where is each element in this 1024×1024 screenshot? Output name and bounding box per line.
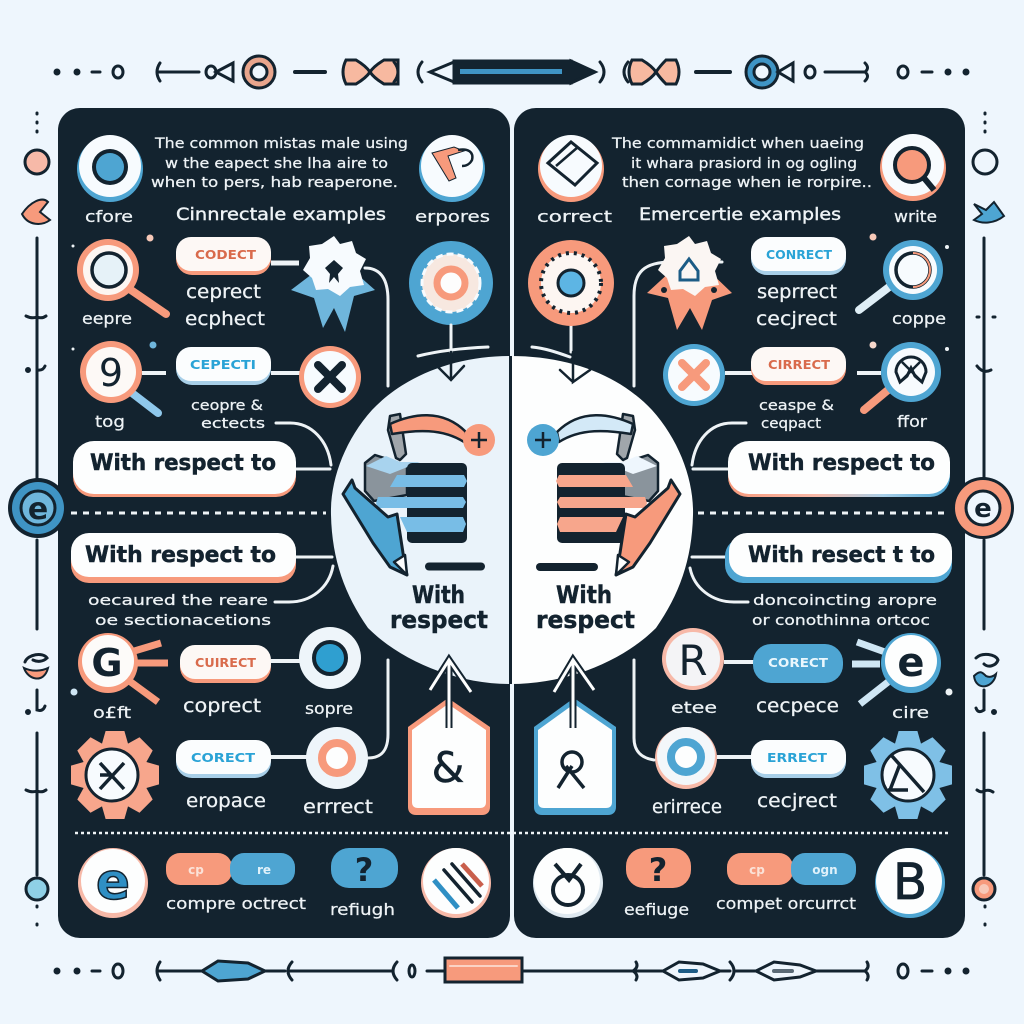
bottom left pill: re (257, 863, 271, 877)
connector right upper (634, 262, 722, 386)
row: left 2: tog (95, 412, 125, 431)
row: right 4: ERRECT (767, 751, 828, 765)
bottom left question (330, 848, 398, 919)
pill: left with respect to upper (73, 441, 296, 497)
central right glyph (527, 414, 680, 575)
panel: left (58, 108, 510, 938)
left intro text: w the eapect she lha aire to (165, 156, 388, 172)
tag: left: & (432, 743, 464, 792)
central right label: With (556, 581, 612, 609)
bottom right knot (533, 848, 603, 918)
row: left 2: 9 (99, 351, 123, 395)
row: left 4: CORECT (191, 751, 256, 765)
arrow down right (532, 325, 590, 382)
row: right 1 icons (528, 234, 949, 330)
tag: right (534, 698, 616, 815)
pill: left with respect to lower: With respect to (85, 543, 276, 568)
left intro text: when to pers, hab reaperone. (151, 175, 398, 191)
bottom left pill: cp (188, 863, 204, 877)
row: left 2: CEPECTI (190, 358, 256, 372)
icon: top left tag (415, 135, 490, 226)
row: right 1 icons: cecjrect (756, 308, 837, 330)
right section heading: Emercertie examples (639, 205, 841, 225)
row: right 3: e (897, 640, 925, 686)
bottom right question (624, 848, 691, 919)
row: right 2: ceqpact (761, 416, 822, 432)
side ornaments left (22, 113, 50, 925)
row: left 3: sopre (305, 699, 353, 718)
central left dash (429, 562, 481, 570)
bottom right letter (875, 848, 945, 918)
row: left 3: CUIRECT (195, 656, 257, 670)
icon: top left tag: erpores (415, 207, 490, 226)
bottom left pill (166, 853, 306, 913)
row: left 2: ectects (201, 416, 265, 432)
right intro text: The commamidict when uaeing (611, 136, 864, 152)
bottom right pill: ogn (812, 863, 838, 877)
row: left 2: ceopre & (191, 398, 263, 414)
central left label: With (412, 581, 465, 609)
right intro text (611, 136, 872, 191)
row: right 2: CIRRECT (768, 358, 831, 372)
central right label: respect (536, 606, 635, 634)
bottom right pill: compet orcurrct (716, 894, 856, 913)
arrow down left (418, 325, 488, 380)
centre circle (331, 356, 693, 684)
row: right 3: cecpece (756, 695, 839, 717)
connectors to right pills (690, 423, 748, 602)
left section heading: Cinnrectale examples (176, 205, 386, 225)
left intro text (151, 136, 408, 191)
pill: left with respect to upper: With respect to (90, 451, 276, 476)
left intro text: The common mistas male using (154, 136, 408, 152)
left sub caption: oecaured the reare (88, 593, 268, 609)
arrow up right (554, 660, 594, 728)
row: right 2 (663, 342, 949, 432)
central right label (536, 581, 635, 634)
right intro text: it whara prasiord in og ogling (631, 156, 857, 172)
row: left 4: eropace (186, 790, 266, 812)
left end badge (8, 478, 68, 538)
icon: top right search: write (894, 207, 937, 226)
icon: top left target (77, 135, 143, 226)
bottom left tools (421, 848, 491, 918)
bottom right question: ? (649, 851, 667, 889)
row: right 1 icons: coppe (892, 309, 946, 328)
central left glyph (343, 414, 495, 575)
row: left 3: coprect (183, 695, 261, 717)
lower dashed divider (75, 832, 950, 834)
bottom left question: refiugh (330, 900, 395, 919)
connectors to left pills (275, 423, 333, 602)
row: right 3: cire (892, 703, 929, 722)
row: right 2: ffor (897, 412, 927, 431)
row: right 3: R (678, 636, 708, 685)
row: right 1 icons: seprrect (757, 281, 837, 303)
row: right 1 icons: CONRECT (766, 248, 833, 262)
row: left 1: CODECT (195, 248, 257, 262)
side ornaments right (973, 113, 1004, 925)
row: right 4: cecjrect (757, 790, 837, 812)
pill: right with respect to lower: With resect t to (748, 543, 935, 568)
icon: top right search (880, 134, 946, 226)
right sub caption: or conothinna ortcoc (752, 613, 930, 629)
left end badge: e (28, 492, 48, 527)
row: left 1 (72, 234, 375, 332)
pill: right with respect to upper (728, 441, 950, 497)
right sub caption (752, 593, 937, 629)
row: left 3 (70, 627, 361, 722)
row: left 1: ecphect (185, 308, 265, 330)
pill: right with respect to upper: With respect to (748, 451, 935, 476)
row: left 1: eepre (82, 309, 132, 328)
right intro text: then cornage when ie rorpire.. (622, 175, 872, 191)
connector left lower (368, 660, 388, 758)
central right dash (540, 563, 594, 571)
row: right 3: etee (671, 698, 717, 717)
row: left 2 (72, 341, 361, 432)
bottom left icon e (78, 848, 148, 918)
icon: top left target: cfore (85, 207, 133, 226)
row: right 4: erirrece (652, 796, 722, 818)
bottom right pill (716, 853, 856, 913)
row: left 3: G (91, 641, 123, 685)
row: right 3 (662, 628, 952, 722)
connector left upper (365, 268, 388, 386)
row: left 3: o£ft (93, 703, 131, 722)
left sub caption (88, 593, 271, 629)
row: right 2: ceaspe & (759, 398, 834, 414)
right sub caption: doncoincting aropre (753, 593, 937, 609)
row: right 3: CORECT (768, 656, 829, 670)
left sub caption: oe sectionacetions (95, 613, 271, 629)
tag: left (408, 698, 490, 815)
central left label: respect (390, 606, 488, 634)
top decorative arrow row (55, 56, 968, 88)
right end badge (952, 477, 1014, 539)
bottom decorative arrow row (55, 958, 968, 982)
row: right 4 (652, 727, 952, 819)
panel: right (514, 108, 965, 938)
row: left 4: errrect (303, 796, 373, 818)
bottom right letter: B (893, 853, 927, 911)
row: left 1: ceprect (186, 281, 261, 303)
bottom left icon e: e (96, 853, 130, 911)
arrow up left (430, 660, 471, 728)
bottom right pill: cp (749, 863, 765, 877)
bottom left pill: compre octrect (166, 894, 306, 913)
row: left 4 (71, 727, 373, 819)
centre dashed axis (71, 512, 950, 514)
icon: left gear (409, 241, 493, 325)
bottom right question: eefiuge (624, 900, 689, 919)
icon: top right square: correct (537, 207, 612, 226)
pill: right with respect to lower (725, 533, 952, 583)
pill: left with respect to lower (71, 533, 296, 583)
icon: top right square (537, 135, 612, 226)
bottom left question: ? (355, 851, 373, 889)
central left label (390, 581, 488, 634)
connector right lower (634, 660, 654, 760)
right end badge: e (974, 494, 992, 524)
